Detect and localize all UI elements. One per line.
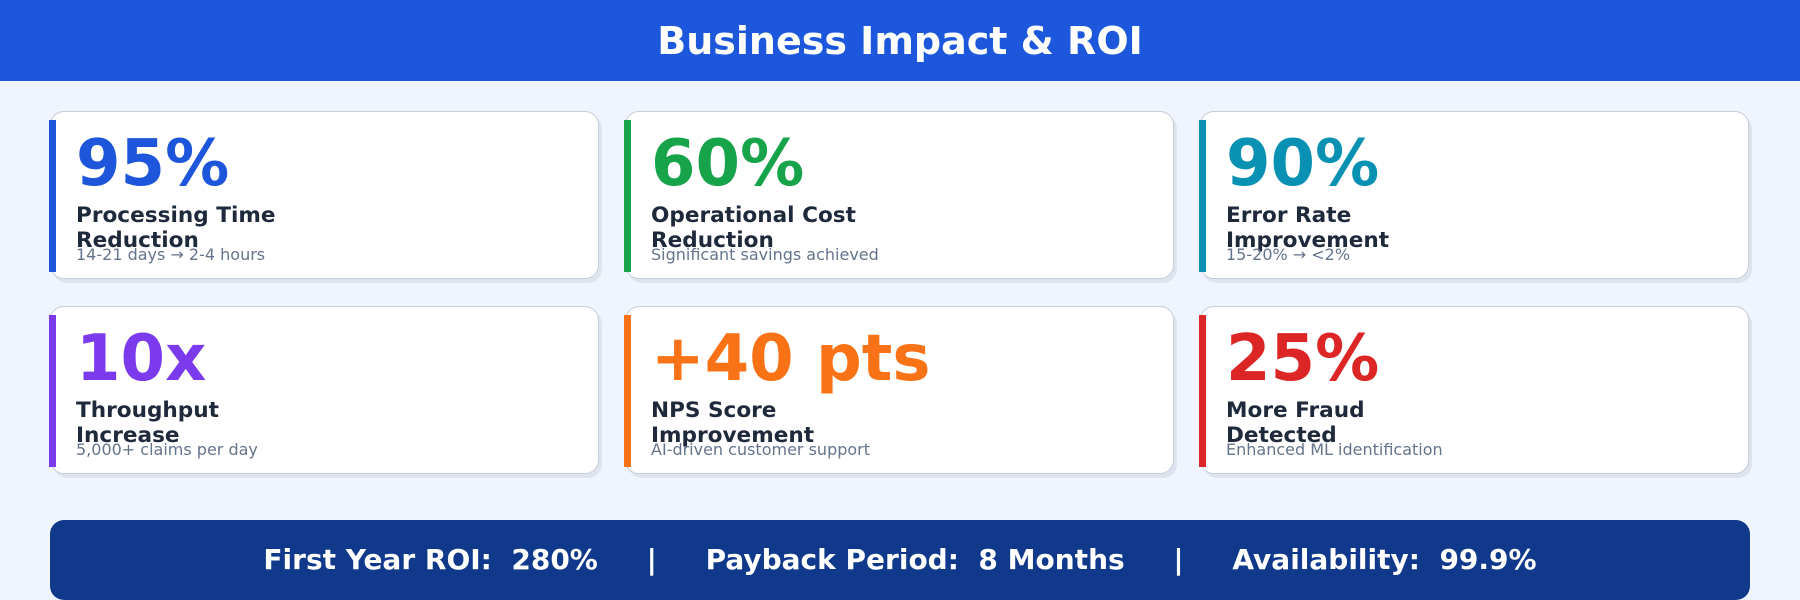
card: operational cost: Operational Cost: [651, 203, 856, 228]
card: fraud: Enhanced ML identification: [1226, 440, 1443, 459]
card: NPS: AI-driven customer support: [651, 440, 870, 459]
card: processing time: 14-21 days → 2-4 hours: [76, 245, 265, 264]
card: throughput: Increase: [76, 423, 180, 448]
card: throughput: [50, 306, 599, 474]
card: error rate: [1200, 111, 1749, 279]
card: throughput: Throughput: [76, 398, 219, 423]
card: error rate: 15-20% → <2%: [1226, 245, 1350, 264]
card: NPS: +40 pts: [651, 322, 930, 396]
card: operational cost: Significant savings achieved: [651, 245, 879, 264]
banner: ROI summary: [50, 520, 1750, 600]
card: fraud: 25%: [1226, 322, 1379, 396]
card: processing time: Processing Time: [76, 203, 276, 228]
card: operational cost: [625, 111, 1174, 279]
title: Business Impact & ROI: [657, 19, 1143, 63]
card: NPS: Improvement: [651, 423, 814, 448]
title: [0, 0, 1800, 81]
card: NPS: NPS Score: [651, 398, 776, 423]
card: throughput: 10x: [76, 322, 206, 396]
card: error rate: Error Rate: [1226, 203, 1351, 228]
card: NPS: [625, 306, 1174, 474]
card: processing time: 95%: [76, 127, 229, 201]
card: throughput: 5,000+ claims per day: [76, 440, 258, 459]
card: error rate: Improvement: [1226, 228, 1389, 253]
card: fraud: Detected: [1226, 423, 1337, 448]
banner: ROI summary: First Year ROI: 280% | Payback Period: 8 Months | Availability: 99.9%: [263, 543, 1537, 576]
card: operational cost: 60%: [651, 127, 804, 201]
card: fraud: [1200, 306, 1749, 474]
card: processing time: [50, 111, 599, 279]
card: operational cost: Reduction: [651, 228, 774, 253]
card: processing time: Reduction: [76, 228, 199, 253]
card: error rate: 90%: [1226, 127, 1379, 201]
card: fraud: More Fraud: [1226, 398, 1365, 423]
